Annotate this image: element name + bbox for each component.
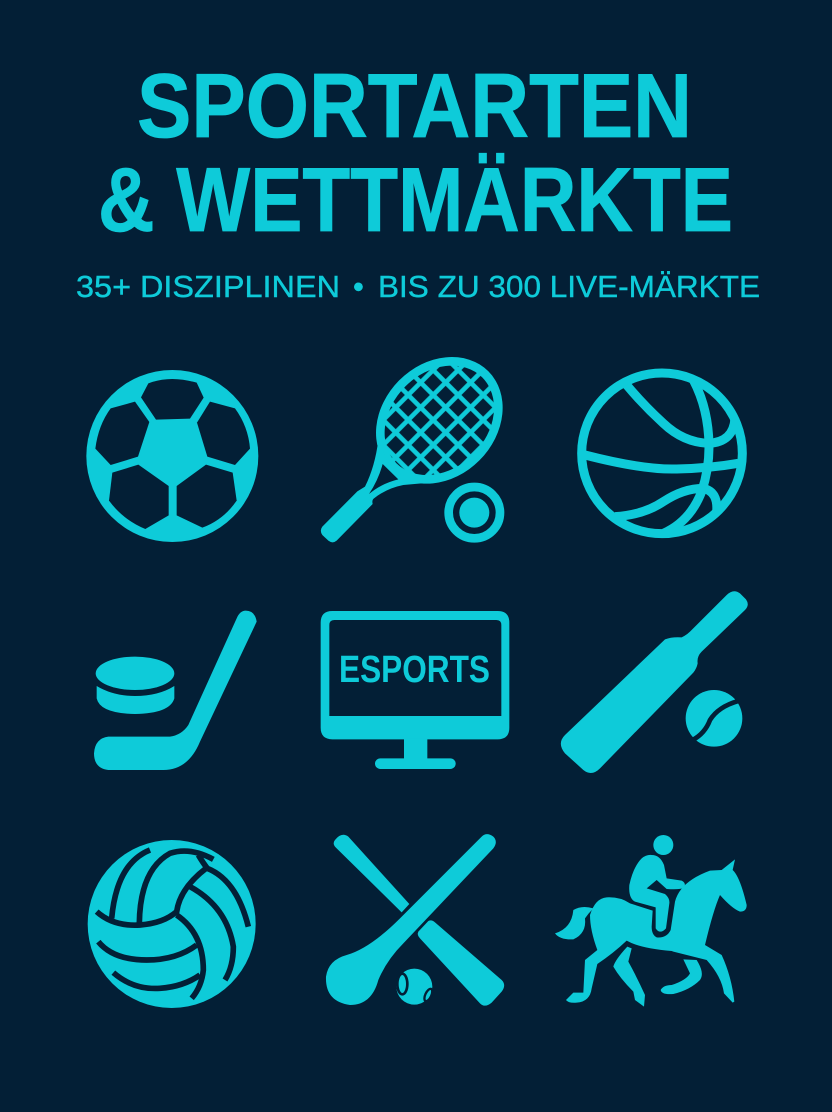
title: & WETTMÄRKTE: [98, 150, 733, 251]
subtitle: BIS ZU 300 LIVE-MÄRKTE: [378, 269, 760, 304]
icon: football: [86, 370, 258, 542]
icon: horse and rider: [555, 835, 747, 1007]
icon: basketball: [582, 373, 742, 534]
title: SPORTARTEN: [137, 56, 692, 157]
icon: cricket bat and ball: [561, 591, 748, 773]
icon: esports monitor: ESPORTS: [339, 649, 490, 691]
subtitle: •: [353, 269, 364, 304]
subtitle: [76, 269, 760, 304]
icon: esports monitor: [321, 611, 509, 769]
icon: volleyball: [88, 840, 256, 1008]
subtitle: 35+ DISZIPLINEN: [76, 269, 340, 304]
icon: hurling sticks and ball: [326, 834, 504, 1006]
icon: hockey stick and puck: [94, 611, 257, 770]
icon: tennis racket and ball: [321, 331, 528, 542]
title: [98, 56, 733, 251]
